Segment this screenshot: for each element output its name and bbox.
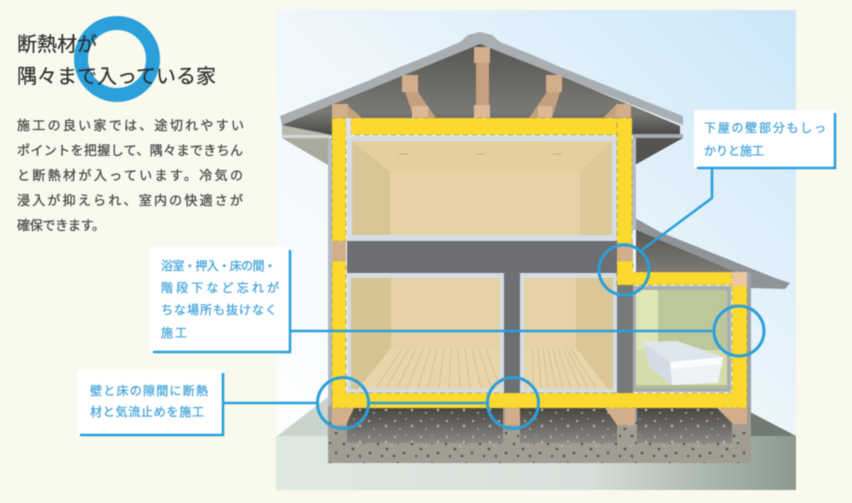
text block: description: ポイントを把握して、隅々まできちん bbox=[17, 143, 243, 158]
text block: description: 施工の良い家では、途切れやすい bbox=[17, 118, 244, 133]
text block: description: と断熱材が入っています。冷気の bbox=[17, 168, 243, 183]
callout: forgotten places bbox=[150, 247, 291, 353]
upper room bbox=[347, 136, 617, 273]
insulation: yellow fill bbox=[332, 118, 747, 408]
ground bbox=[276, 397, 796, 490]
callout: forgotten places: ちな場所も抜けなく bbox=[161, 303, 277, 317]
interior structure bbox=[347, 136, 633, 394]
connector lines bbox=[224, 168, 714, 403]
callout: forgotten places: 浴室・押入・床の間・ bbox=[161, 259, 276, 273]
callout: wall and floor gap: 材と気流止めを施工 bbox=[90, 404, 204, 419]
icon: bathtub bbox=[642, 341, 723, 385]
panel: house illustration bbox=[276, 10, 796, 490]
title: 隅々まで入っている家 bbox=[17, 65, 216, 88]
wood blocks in wall and under floor bbox=[332, 241, 747, 425]
title bbox=[17, 33, 216, 88]
sky background bbox=[276, 10, 796, 490]
callout: lean-to wall: かりと施工 bbox=[704, 144, 764, 158]
title: 断熱材が bbox=[17, 33, 97, 56]
callout: forgotten places: 階段下など忘れが bbox=[161, 280, 279, 295]
callout: forgotten places: 施工 bbox=[161, 326, 187, 340]
text block: description: 浸入が抑えられ、室内の快適さが bbox=[17, 193, 243, 208]
lower left room bbox=[347, 273, 504, 393]
outer wall strips bbox=[328, 138, 751, 406]
callout: lean-to wall bbox=[694, 110, 836, 168]
decorative ring behind title bbox=[81, 23, 153, 95]
roof timbers bbox=[332, 47, 631, 118]
lean-to roof bbox=[635, 218, 790, 289]
callout: lean-to wall: 下屋の壁部分もしっ bbox=[704, 121, 826, 135]
highlight circles bbox=[318, 245, 764, 428]
main roof bbox=[280, 32, 683, 166]
text block: description bbox=[17, 118, 244, 233]
lower right room bbox=[520, 273, 617, 393]
bathroom bbox=[633, 286, 731, 392]
callout: wall and floor gap bbox=[77, 370, 224, 436]
callout: wall and floor gap: 壁と床の隙間に断熱 bbox=[90, 384, 208, 398]
concrete foundation bbox=[328, 405, 751, 463]
text block: description: 確保できます。 bbox=[17, 218, 105, 233]
